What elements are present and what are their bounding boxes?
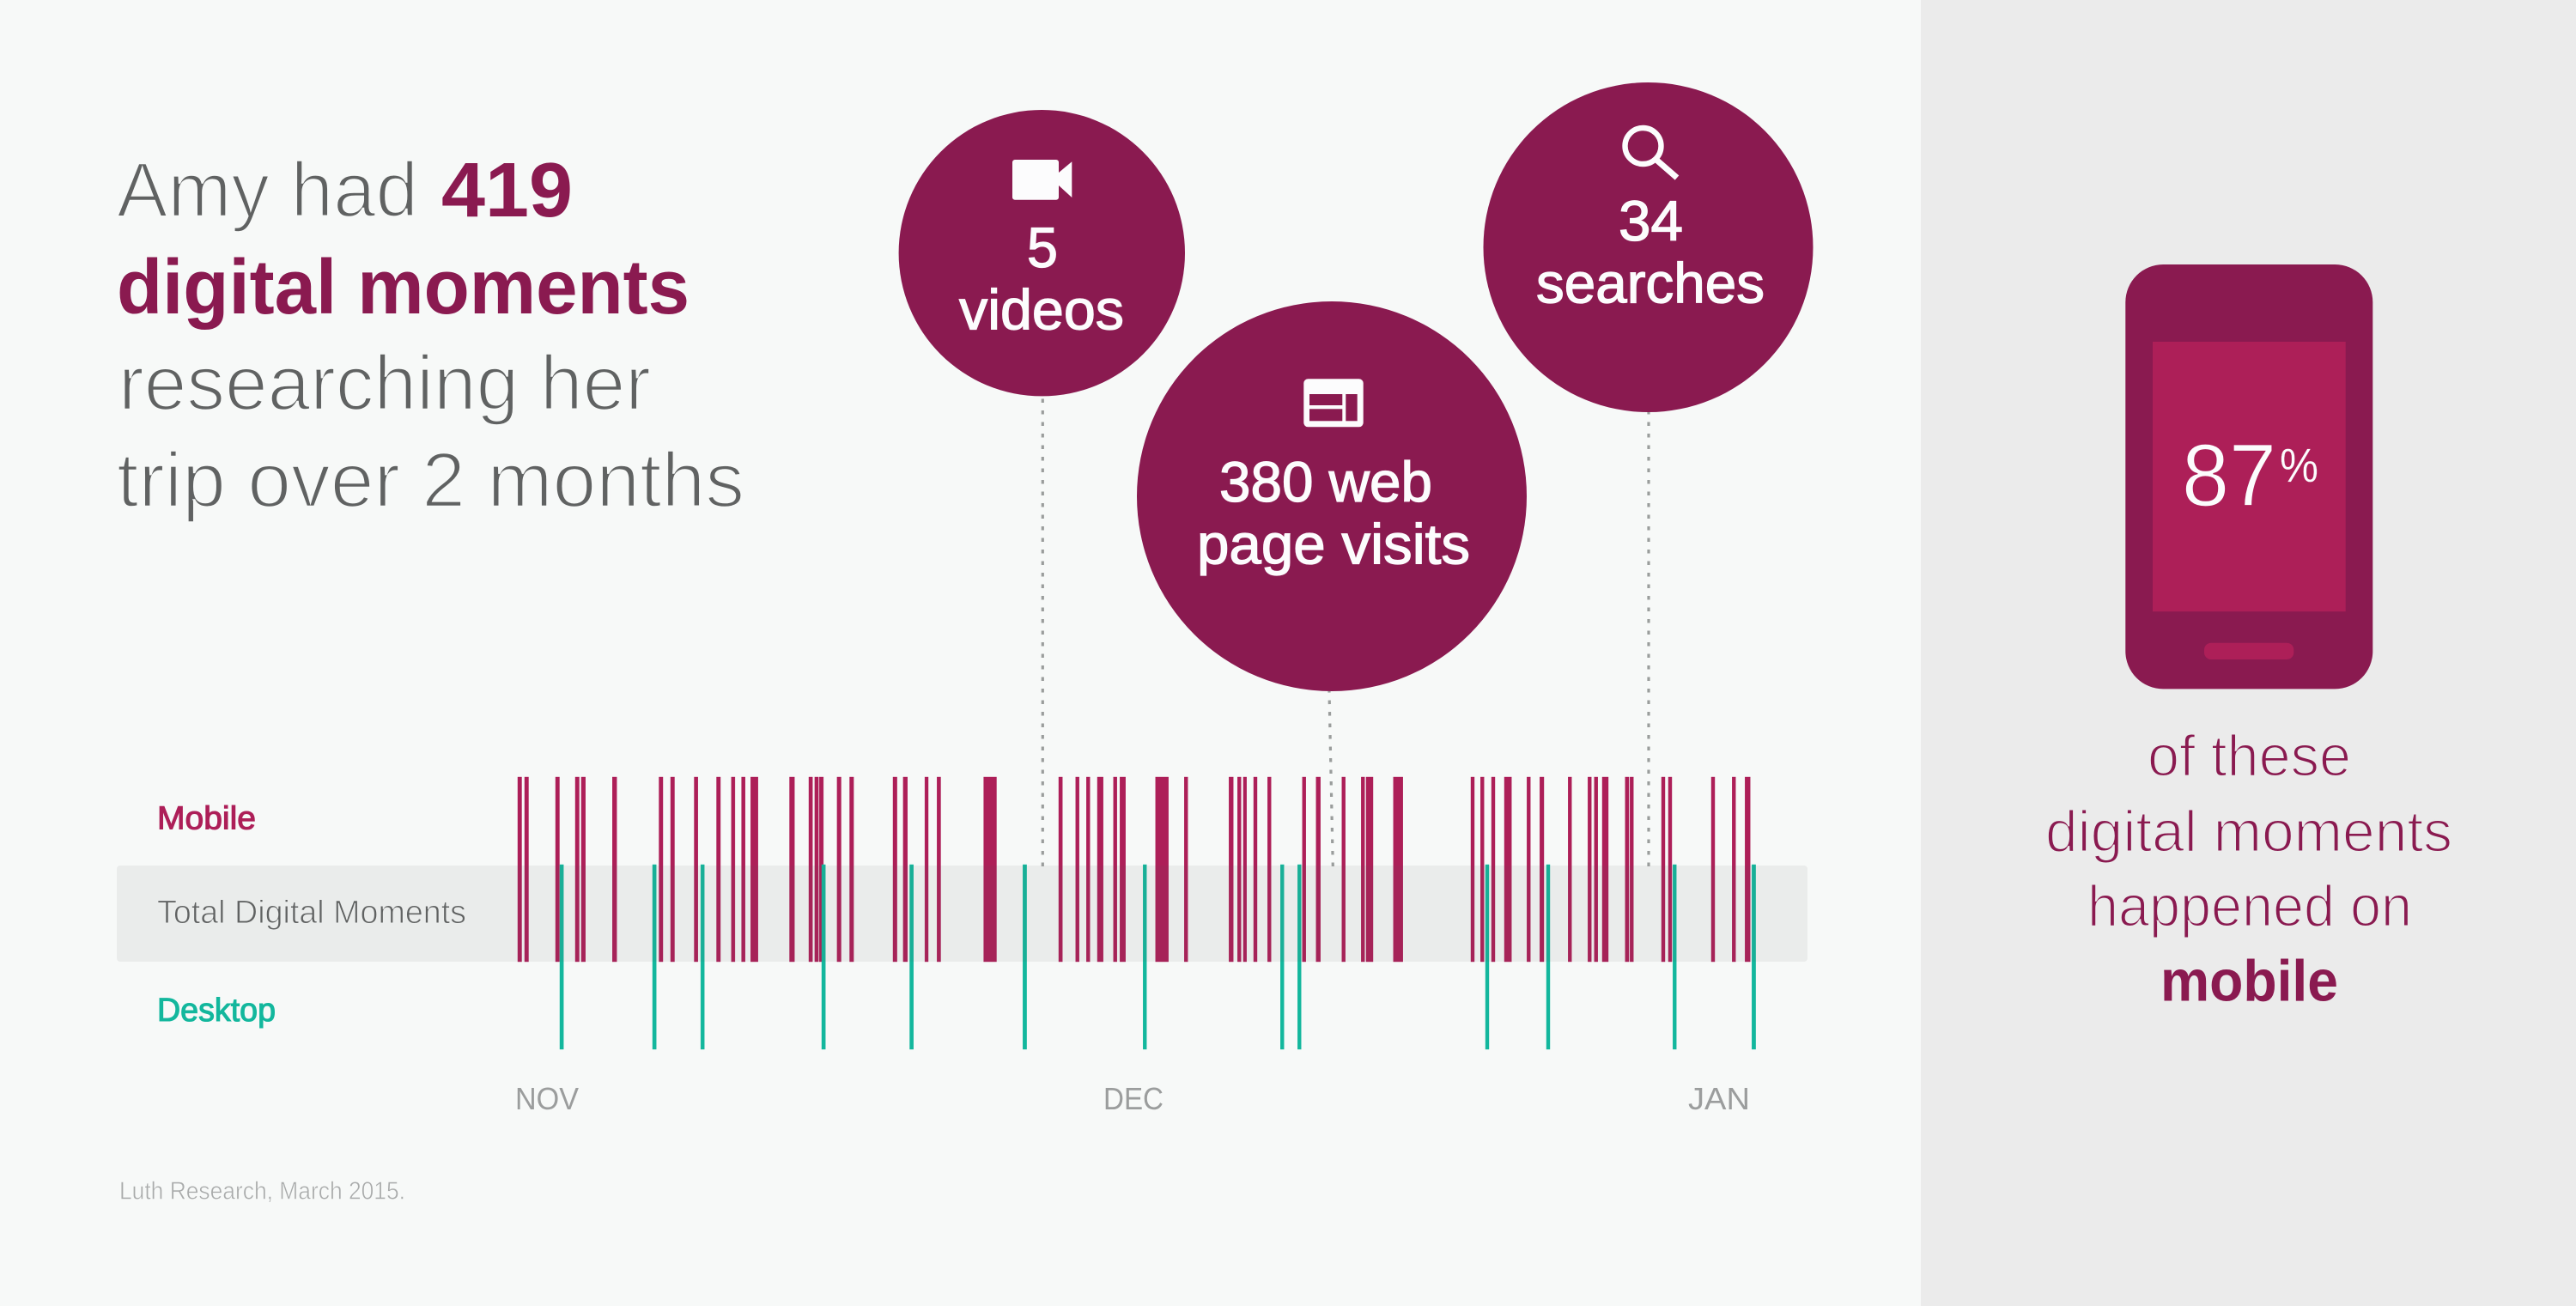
label: mobile: Mobile xyxy=(157,800,256,836)
axis labels: months xyxy=(515,1081,1750,1116)
callout: videos: 5 xyxy=(1027,216,1058,279)
mobile caption xyxy=(2045,724,2452,1014)
callout: searches xyxy=(1484,82,1814,412)
mobile caption: mobile xyxy=(2160,949,2338,1014)
phone graphic xyxy=(2125,264,2372,689)
callout: searches: 34 xyxy=(1619,189,1683,252)
phone screen xyxy=(2153,342,2346,611)
phone home button xyxy=(2204,643,2293,659)
title: 419 xyxy=(441,148,573,234)
icon: video camera xyxy=(1012,160,1072,200)
label: total digital moments: Total Digital Moments xyxy=(157,895,466,931)
title xyxy=(117,148,744,524)
axis labels: months: NOV xyxy=(515,1081,579,1116)
stat: 87 percent: % xyxy=(2280,438,2318,492)
stat: 87 percent: 87 xyxy=(2182,426,2276,525)
mobile caption: happened on xyxy=(2087,874,2412,939)
source note: Luth Research, March 2015. xyxy=(119,1178,405,1206)
title: digital moments xyxy=(117,245,690,331)
panel: right sidebar xyxy=(1921,0,2576,1306)
mobile caption: of these xyxy=(2148,724,2351,789)
callout: web page visits: page visits xyxy=(1197,513,1470,576)
icon: web page xyxy=(1303,379,1364,427)
callout: searches: searches xyxy=(1536,252,1765,315)
axis labels: months: DEC xyxy=(1103,1081,1163,1116)
callout: web page visits xyxy=(1137,301,1527,691)
dotted connector lines xyxy=(1042,396,1649,866)
callout: videos: videos xyxy=(959,277,1124,341)
icon: magnifying glass xyxy=(1625,128,1677,178)
mobile caption: digital moments xyxy=(2045,799,2452,865)
title: trip over 2 months xyxy=(117,438,744,524)
callout: videos xyxy=(899,110,1185,396)
timeline chart xyxy=(117,777,1807,1049)
axis labels: months: JAN xyxy=(1688,1081,1750,1116)
title: Amy had xyxy=(117,148,418,234)
callout: web page visits: 380 web xyxy=(1219,450,1432,513)
title: researching her xyxy=(118,341,651,427)
mobile moment bars xyxy=(518,777,1750,962)
phone body xyxy=(2125,264,2372,689)
desktop moment bars xyxy=(560,865,1756,1049)
label: desktop: Desktop xyxy=(157,993,276,1029)
total digital moments band xyxy=(117,866,1807,962)
